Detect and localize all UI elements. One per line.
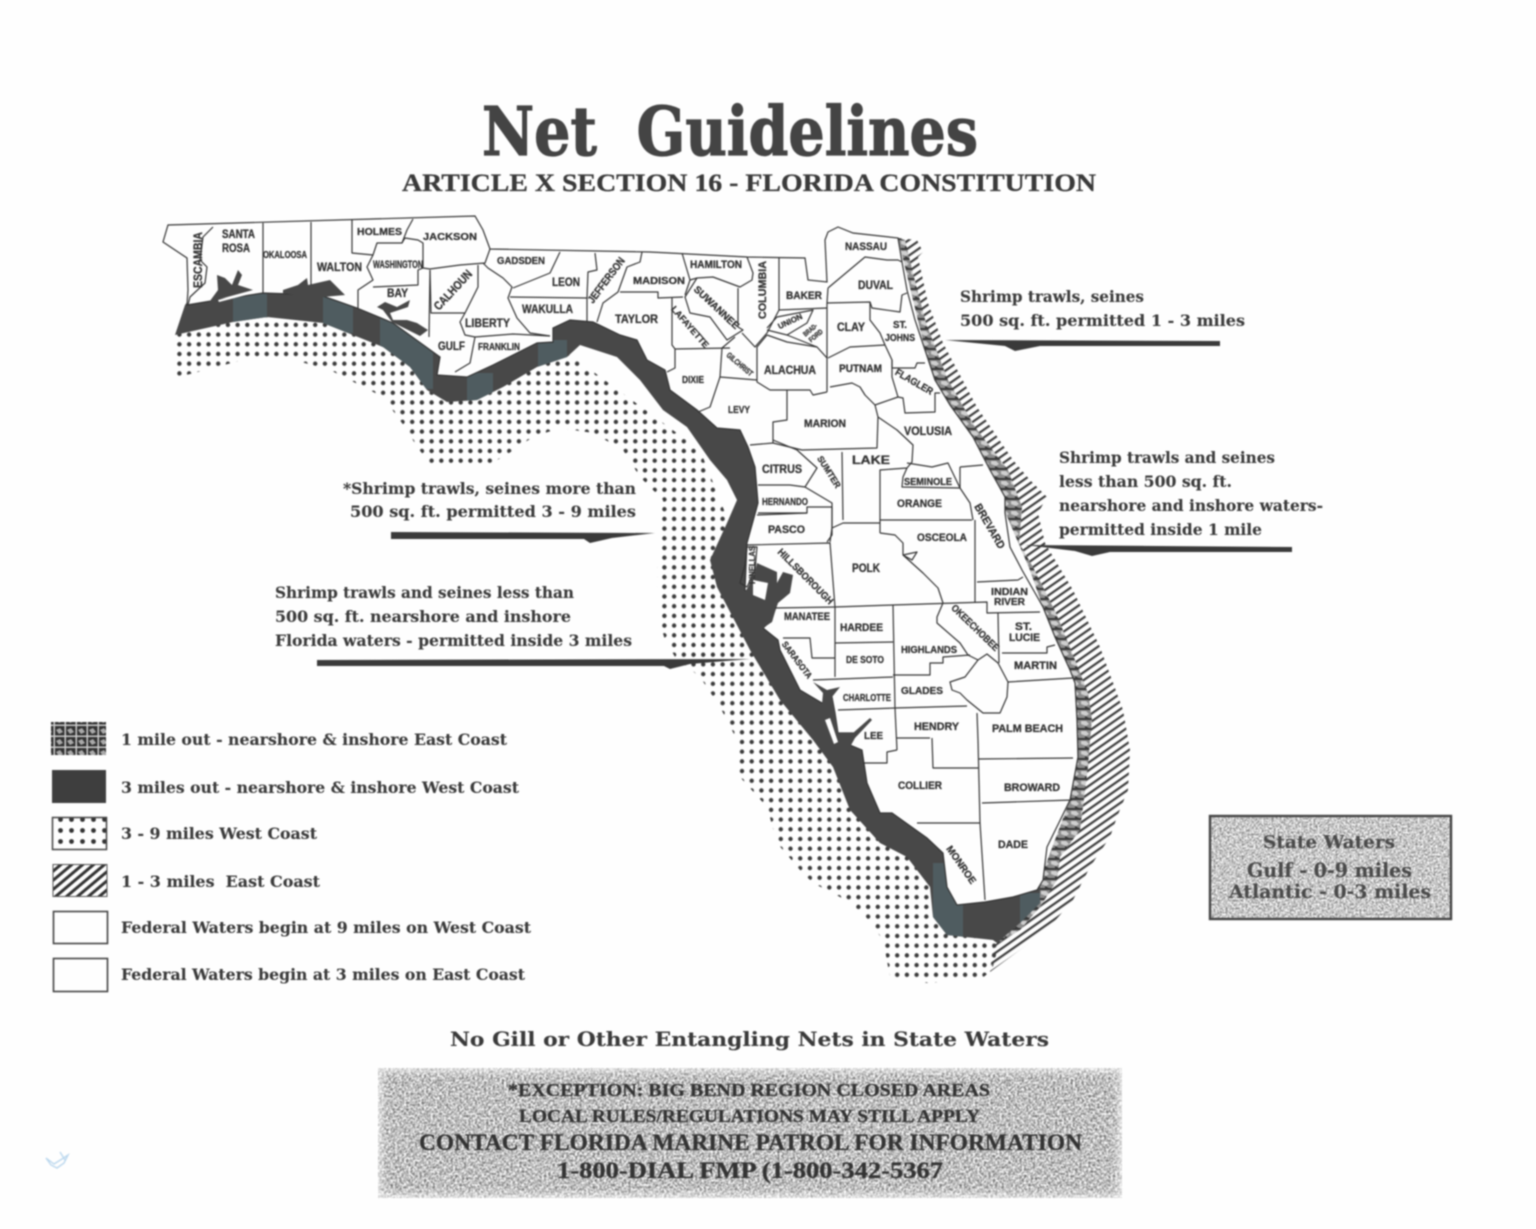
panel: exception and contact: CONTACT FLORIDA MARINE PATROL FOR INFORMATION [419, 1130, 1082, 1155]
panel: State Waters [1210, 816, 1451, 919]
county names: FRANKLIN [478, 342, 520, 353]
county names: PALM BEACH [992, 723, 1063, 735]
title: Net Guidelines [482, 92, 978, 171]
county names: INDIAN [991, 587, 1028, 598]
county names: HAMILTON [690, 259, 742, 271]
arrow: to 3-9 mile West Coast zone [391, 532, 655, 543]
county names [191, 227, 1063, 887]
county names: LEVY [728, 405, 750, 416]
county names: GULF [438, 339, 465, 353]
legend item: 3 miles West Coast [52, 770, 520, 803]
county names: HILLSBOROUGH [775, 547, 835, 607]
county names: GILCHRIST [725, 351, 755, 378]
zone: 3 miles West Coast [175, 280, 1040, 943]
county names: MANATEE [784, 611, 830, 623]
legend item: Federal Waters East Coast: Federal Waters begin at 3 miles on East Coast [121, 965, 526, 984]
ink smudge [46, 1152, 68, 1168]
zone: 1-3 miles East Coast [898, 238, 1130, 972]
county names: SUMTER [815, 454, 843, 490]
callout: inside 1 mile East Coast: nearshore and inshore waters- [1059, 496, 1323, 515]
callout: 3-9 miles West Coast [343, 479, 636, 521]
map of Florida [163, 216, 1130, 983]
panel: State Waters: State Waters [1263, 832, 1395, 853]
county names: MONROE [943, 844, 978, 887]
county names: PUTNAM [839, 363, 882, 375]
county names: JACKSON [423, 232, 477, 243]
notice: no gill nets: No Gill or Other Entangling Nets in State Waters [450, 1027, 1049, 1051]
arrow: to 1 mile East Coast zone [1025, 545, 1292, 556]
county names: BREVARD [971, 502, 1007, 551]
county names: COLLIER [898, 780, 942, 792]
county names: HARDEE [840, 622, 883, 634]
county names: ESCAMBIA [191, 232, 205, 288]
county names: LIBERTY [465, 316, 510, 330]
county names: LEE [864, 731, 883, 742]
county names: CITRUS [762, 462, 802, 476]
county names: POLK [852, 561, 880, 575]
county names: MARTIN [1014, 660, 1057, 672]
county names: DUVAL [858, 278, 893, 292]
legend item: 3 miles West Coast: 3 miles out - nearshore & inshore West Coast [121, 778, 520, 797]
callout: inside 3 miles West Coast: Shrimp trawls and seines less than [275, 583, 574, 602]
county names: JOHNS [885, 333, 915, 344]
county names: GADSDEN [497, 256, 545, 267]
county names: ST. [1015, 621, 1032, 633]
county names: JEFFERSON [586, 255, 628, 306]
legend item: 3-9 miles West Coast [52, 818, 318, 850]
county names: DADE [998, 839, 1028, 851]
county names: HIGHLANDS [901, 645, 957, 656]
callout: inside 1 mile East Coast: Shrimp trawls and seines [1059, 448, 1275, 467]
panel: State Waters: Gulf - 0-9 miles [1247, 858, 1412, 882]
county names: LAKE [852, 453, 890, 467]
land [163, 216, 1078, 905]
county names: DE SOTO [846, 655, 884, 666]
callout: inside 1 mile East Coast [1059, 448, 1323, 539]
county names: OKALOOSA [263, 250, 307, 261]
county names: LUCIE [1009, 632, 1040, 644]
county names: BAY [387, 286, 408, 300]
county names: SUWANNEE [691, 284, 741, 332]
county names: ALACHUA [764, 363, 816, 377]
county names: HOLMES [357, 227, 402, 238]
callout: 1-3 miles East Coast: 500 sq. ft. permitted 1 - 3 miles [960, 311, 1245, 330]
legend item: Federal Waters East Coast [54, 958, 526, 992]
subtitle: ARTICLE X SECTION 16 - FLORIDA CONSTITUTION [402, 170, 1096, 197]
arrow: to 3 mile West Coast zone [317, 659, 750, 669]
county names: LAFAYETTE [669, 304, 711, 350]
legend [51, 722, 532, 992]
county names: BRAD- [802, 322, 819, 338]
county names: SANTA [222, 227, 255, 241]
callout: 1-3 miles East Coast [960, 287, 1245, 330]
callout: inside 3 miles West Coast [275, 583, 632, 650]
legend item: 1-3 miles East Coast: 1 - 3 miles East Coast [121, 872, 321, 891]
arrow: to 1-3 mile East Coast zone [945, 340, 1220, 351]
callout: 3-9 miles West Coast: *Shrimp trawls, seines more than [343, 479, 636, 498]
county names: HERNANDO [762, 497, 808, 508]
county names: LEON [552, 275, 580, 289]
county names: OKEECHOBEE [949, 603, 1001, 654]
county names: FORD [808, 329, 825, 344]
county names: PINELLAS [748, 545, 757, 584]
county names: BAKER [786, 290, 822, 302]
county names: DIXIE [682, 375, 704, 386]
panel: exception and contact: *EXCEPTION: BIG BEND REGION CLOSED AREAS [508, 1080, 990, 1100]
panel: exception and contact [378, 1068, 1122, 1198]
county names: UNION [777, 312, 804, 331]
callout: inside 1 mile East Coast: less than 500 sq. ft. [1059, 472, 1232, 491]
legend item: 1 mile East Coast [51, 722, 508, 755]
county names: TAYLOR [615, 312, 658, 326]
legend item: Federal Waters West Coast: Federal Waters begin at 9 miles on West Coast [121, 918, 532, 937]
county names: CALHOUN [431, 267, 475, 313]
county names: GLADES [901, 686, 943, 697]
county names: SEMINOLE [904, 477, 952, 488]
legend item: 3-9 miles West Coast: 3 - 9 miles West Coast [121, 824, 318, 843]
county names: RIVER [994, 597, 1026, 608]
legend item: Federal Waters West Coast [54, 912, 532, 944]
county names: CLAY [837, 320, 865, 334]
county names: FLAGLER [893, 367, 935, 398]
panel: exception and contact: LOCAL RULES/REGULATIONS MAY STILL APPLY [519, 1106, 980, 1126]
panel: exception and contact: 1-800-DIAL FMP (1-800-342-5367 [557, 1158, 943, 1183]
callout: inside 3 miles West Coast: Florida waters - permitted inside 3 miles [275, 631, 632, 650]
county names: ST. [893, 320, 907, 331]
zone: 1 mile East Coast [898, 238, 1092, 942]
county names: VOLUSIA [904, 424, 952, 438]
bays and estuaries [207, 270, 872, 750]
legend item: 1-3 miles East Coast [53, 864, 321, 896]
callout: inside 3 miles West Coast: 500 sq. ft. nearshore and inshore [275, 607, 571, 626]
callout: 3-9 miles West Coast: 500 sq. ft. permitted 3 - 9 miles [350, 502, 636, 521]
islands [218, 292, 838, 744]
county names: WALTON [317, 260, 362, 274]
county names: WAKULLA [522, 302, 573, 316]
county names: MARION [804, 418, 846, 430]
county names: BROWARD [1004, 782, 1060, 794]
county names: NASSAU [845, 241, 887, 253]
panel: State Waters: Atlantic - 0-3 miles [1228, 881, 1431, 903]
county names: CHARLOTTE [843, 693, 891, 704]
county names: COLUMBIA [757, 261, 769, 319]
callout: inside 1 mile East Coast: permitted inside 1 mile [1059, 520, 1262, 539]
callout: 1-3 miles East Coast: Shrimp trawls, seines [960, 287, 1144, 306]
county names: OSCEOLA [917, 532, 967, 544]
legend item: 1 mile East Coast: 1 mile out - nearshore & inshore East Coast [121, 730, 508, 749]
county names: WASHINGTON [373, 259, 423, 271]
county names: ORANGE [897, 498, 942, 510]
county names: ROSA [222, 241, 250, 255]
county boundaries [188, 219, 1073, 900]
county names: HENDRY [914, 721, 960, 733]
county names: MADISON [633, 276, 685, 287]
county names: SARASOTA [780, 639, 814, 681]
county names: PASCO [768, 524, 805, 536]
zone: 3-9 miles West Coast [175, 300, 1000, 983]
